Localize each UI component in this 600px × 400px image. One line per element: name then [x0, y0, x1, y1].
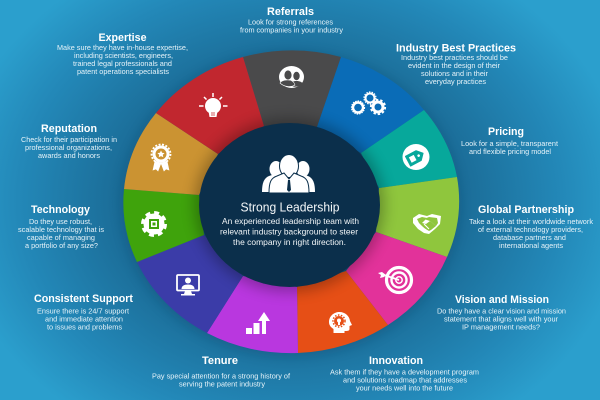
label: pricing: Pricing	[488, 126, 524, 138]
segment: industry best practices	[317, 57, 424, 153]
label: innovation: Innovation	[369, 355, 423, 367]
center description: relevant industry background to steer	[220, 226, 358, 236]
center description	[220, 216, 359, 247]
icon: leadership people	[262, 154, 315, 193]
center circle	[199, 123, 380, 287]
label: tenure: Pay special attention for a strong history of	[152, 372, 290, 380]
label: referrals: Look for strong references	[248, 18, 333, 26]
label: expertise: Make sure they have in-house expertise,	[57, 44, 188, 52]
label: global partnership: database partners and	[493, 234, 566, 242]
label: vision and mission: Vision and Mission	[455, 294, 549, 306]
label: technology	[18, 204, 104, 250]
segment: reputation	[124, 113, 218, 195]
label: referrals: from companies in your industry	[240, 26, 343, 34]
label: expertise: patent operations specialists	[77, 68, 169, 76]
icon: innovation head	[329, 312, 352, 333]
label: global partnership: Global Partnership	[478, 204, 575, 216]
icon: price tag	[402, 144, 430, 170]
label: technology: capable of managing	[27, 234, 95, 242]
label: innovation: your needs well into the future	[356, 384, 453, 392]
segment: consistent support	[137, 235, 243, 333]
icon: light bulb	[199, 93, 228, 117]
label: technology: a portfolio of any size?	[25, 242, 98, 250]
segment: tenure	[207, 276, 298, 353]
label: reputation	[21, 123, 117, 160]
center shadow	[194, 118, 384, 292]
label: reputation: Reputation	[41, 123, 97, 135]
segment: vision and mission	[346, 232, 447, 325]
label: vision and mission: IP management needs?	[462, 324, 540, 332]
icon: gears	[352, 92, 385, 114]
label: innovation: Ask them if they have a development program	[330, 368, 479, 376]
label: vision and mission	[437, 294, 566, 332]
icon: award badge	[152, 144, 170, 171]
label: consistent support: and immediate attention	[45, 316, 123, 324]
label: consistent support: Consistent Support	[34, 293, 133, 305]
label: expertise	[57, 32, 188, 76]
label: industry best practices	[396, 42, 516, 86]
label: referrals	[240, 6, 343, 34]
segment: referrals	[243, 50, 341, 127]
label: industry best practices: everyday practices	[425, 78, 486, 86]
segment: innovation	[297, 271, 388, 353]
donut ring	[120, 50, 462, 358]
label: innovation	[330, 355, 479, 392]
label: global partnership: Take a look at their worldwide network	[469, 218, 593, 226]
label: reputation: professional organizations,	[25, 144, 112, 152]
label: tenure: Tenure	[202, 355, 238, 367]
label: reputation: Check for their participation in	[21, 136, 117, 144]
label: consistent support: to issues and problems	[47, 324, 122, 332]
label: expertise: trained legal professionals and	[73, 60, 172, 68]
label: consistent support	[34, 293, 133, 332]
label: industry best practices: Industry Best Practices	[396, 42, 516, 54]
icon: target	[378, 268, 412, 292]
label: technology: scalable technology that is	[18, 226, 104, 234]
icon: growth bars	[246, 312, 270, 334]
label: industry best practices: solutions and in their	[421, 70, 489, 78]
label: vision and mission: statement that aligns well with your	[444, 316, 559, 324]
icon: handshake	[413, 214, 441, 234]
center description: the company in right direction.	[233, 237, 346, 247]
label: industry best practices: evident in the design of their	[408, 62, 501, 70]
label: pricing	[461, 126, 558, 156]
segment: global partnership	[376, 177, 459, 257]
label: consistent support: Ensure there is 24/7 support	[37, 308, 129, 316]
label: innovation: and solutions roadmap that addresses	[343, 376, 467, 384]
label: referrals: Referrals	[267, 6, 314, 18]
label: tenure	[152, 355, 290, 388]
label: global partnership: of external technology providers,	[478, 226, 583, 234]
segment: expertise	[156, 57, 264, 154]
label: expertise: Expertise	[98, 32, 147, 44]
icon: support monitor	[177, 275, 199, 296]
icon: referrals people	[279, 66, 304, 88]
label: vision and mission: Do they have a clear vision and mission	[437, 308, 566, 316]
label: global partnership: international agents	[499, 242, 563, 250]
center heading: Strong Leadership	[240, 200, 340, 214]
segment: pricing	[361, 110, 457, 188]
label: global partnership	[469, 204, 593, 250]
icon: chip gear	[142, 212, 166, 236]
segment: technology	[123, 189, 204, 262]
label: tenure: serving the patent industry	[179, 380, 265, 388]
label: pricing: and flexible pricing model	[469, 148, 551, 156]
center description: An experienced leadership team with	[222, 216, 359, 226]
label: reputation: awards and honors	[38, 152, 100, 160]
label: technology: Technology	[31, 204, 90, 216]
label: technology: Do they use robust,	[29, 218, 92, 226]
label: industry best practices: Industry best practices should be	[401, 54, 508, 62]
label: expertise: including scientists, engineers,	[74, 52, 173, 60]
label: pricing: Look for a simple, transparent	[461, 140, 558, 148]
